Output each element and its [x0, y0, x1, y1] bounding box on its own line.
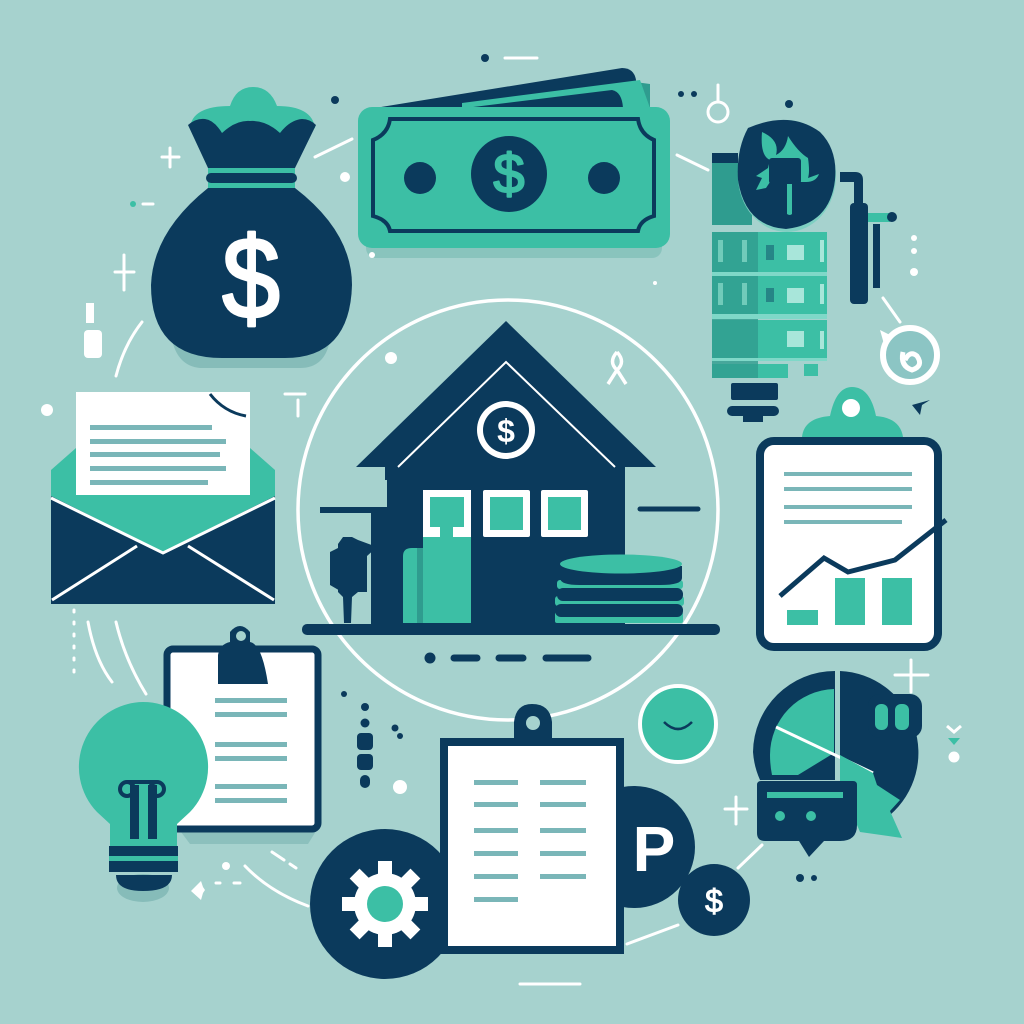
decorative dashes and sparkles	[74, 58, 928, 984]
icon: document	[444, 704, 750, 950]
coin stack	[555, 554, 684, 623]
icon: banknote: $	[493, 142, 525, 205]
panel: central circle	[298, 300, 718, 720]
icon: small dot marks	[41, 172, 918, 870]
icon: clipboard with chart	[760, 387, 946, 647]
icon: wind turbine building	[712, 120, 937, 422]
icon: smiley	[640, 686, 716, 762]
icon: pie chart and speech bubbles	[753, 671, 961, 857]
icon: white arrow	[191, 881, 205, 900]
icon: house: $	[497, 413, 515, 449]
dollar sign: $	[222, 214, 280, 344]
street lamp	[330, 537, 377, 623]
icon: ribbon	[608, 352, 626, 384]
icon: money bag	[151, 87, 352, 368]
icon: document: $	[705, 883, 723, 919]
icon: clipboard with lines	[167, 626, 318, 844]
icon: open envelope	[51, 392, 275, 604]
icon: house	[302, 321, 720, 664]
icon: banknote	[358, 68, 670, 258]
icon: gear badge	[310, 829, 460, 979]
icon: document: P	[633, 813, 675, 885]
icon: light bulb	[79, 702, 208, 902]
icon: small chain left	[84, 303, 102, 358]
